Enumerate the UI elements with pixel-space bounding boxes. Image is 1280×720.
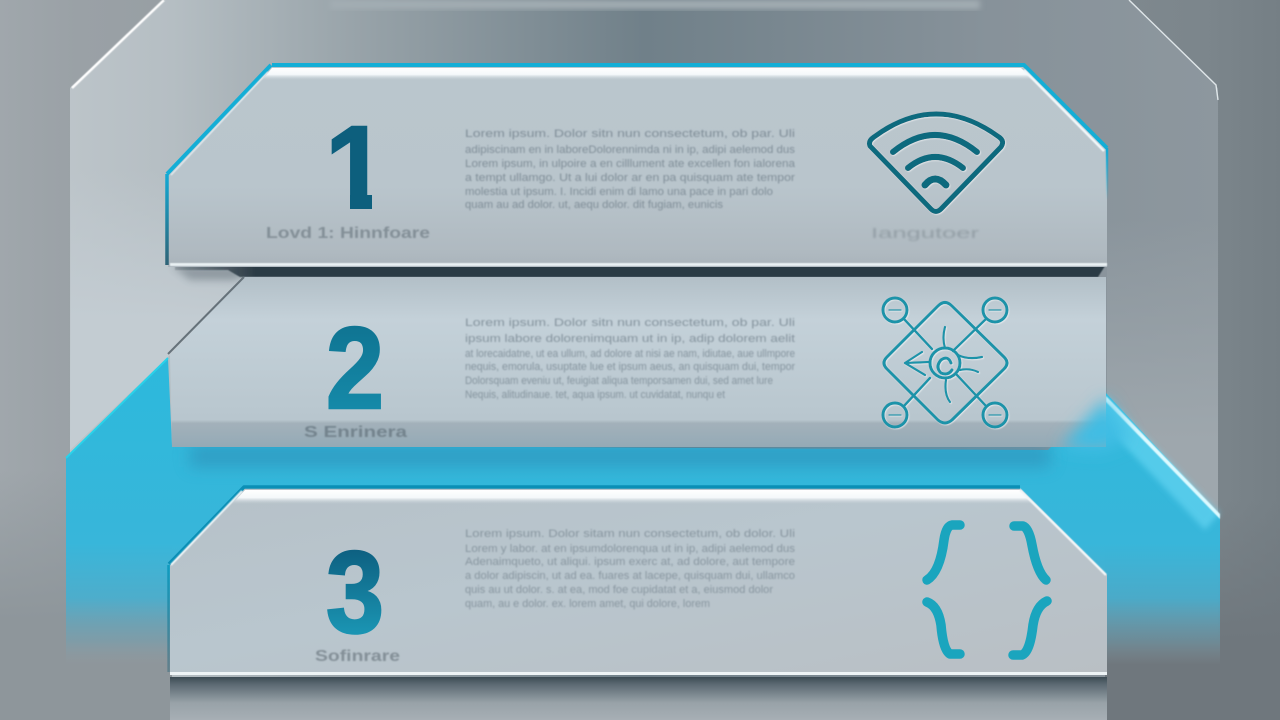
panel 3 text block: Lorem ipsum. Dolor sitam nun consectetum, ob dolor. Uli: [465, 528, 795, 540]
panel 1 text block: [465, 128, 796, 211]
panel 2 right teal glow: [1060, 398, 1130, 452]
panel 1 text block: Lorem ipsum. Dolor sitn nun consectetum, ob par. Uli: [465, 128, 795, 140]
panel 1 cyan edge: [272, 65, 1107, 148]
bottom-right gray fade: [1105, 500, 1280, 720]
panel 1 text block: molestia ut ipsum. I. Incidi enim di lamo una pace in pari dolo: [465, 186, 773, 198]
plate top bar: [330, 0, 980, 9]
panel 2 text block: Dolorsquam eveniu ut, feuigiat aliqua temporsamen dui, sed amet lure: [465, 375, 773, 387]
number 2: 2: [326, 303, 384, 433]
icon 1 label: Iangutoer: [871, 225, 979, 242]
panel 2 text block: [465, 317, 795, 401]
panel 2 text block: Nequis, alitudinaue. tet, aqua ipsum. ut cuvidatat, nunqu et: [465, 389, 725, 401]
plate top-left highlight: [72, 0, 164, 88]
panel 1 label: Lovd 1: Hinnfoare: [266, 225, 430, 242]
panel 2 text block: at lorecaidatne, ut ea ullum, ad dolore at nisi ae nam, idiutae, aue ullmpore: [465, 348, 795, 360]
number 3: 3: [326, 527, 384, 657]
plate top-right highlight: [1129, 0, 1218, 100]
panel 1 soft shadow: [172, 266, 260, 280]
panel 3 body: [170, 488, 1107, 675]
plate left lower light zone: [70, 170, 300, 450]
panel 1 dark strip: [175, 266, 1105, 277]
panel 2: [168, 277, 1130, 452]
panel 1 bottom edge: [170, 263, 1107, 266]
panel 1 text block: quam au ad dolor. ut, aequ dolor. dit fugiam, eunicis: [465, 199, 724, 211]
panel 2 body: [170, 277, 1106, 447]
bottom-left gray fade: [0, 470, 172, 720]
panel 3 highlight: [232, 490, 1034, 504]
glowing right edge: [1095, 395, 1220, 530]
panel 2 text block: nequis, emorula, usuptate lue et ipsum aeus, an quisquam dui, tempor: [465, 361, 795, 373]
area under panel 3: [170, 677, 1107, 720]
panel 1 text block: adipiscinam en in laboreDolorennimda ni in ip, adipi aelemod dus: [465, 144, 796, 156]
panel 3 text block: [465, 528, 796, 610]
number 1: 1: [325, 102, 387, 234]
panel 3 text block: quam, au e dolor. ex. lorem amet, qui dolore, lorem: [465, 598, 710, 610]
panel 2 text block: Lorem ipsum. Dolor sitn nun consectetum, ob par. Uli: [465, 317, 795, 329]
panel 1: [167, 65, 1107, 280]
panel 3 cyan edge: [169, 487, 1020, 564]
band shade under panel 2: [190, 445, 1050, 467]
icon: network diamond: [883, 298, 1007, 427]
panel 2 text block: ipsum labore dolorenimquam ut in ip, adip dolorem aelit: [465, 333, 795, 345]
panel 2 left dark edge: [168, 277, 244, 354]
panel 3 text block: Adenaimqueto, ut aliqui. ipsum exerc at, ad dolore, aut tempore: [465, 556, 795, 568]
icon: wifi: [870, 114, 1003, 212]
plate right lower zone: [1107, 220, 1218, 515]
panel 3: [168, 487, 1107, 720]
panel 3 text block: quis au ut dolor. s. at ea, mod foe cupidatat et a, eiusmod dolor: [465, 584, 773, 596]
cyan left edge: [66, 358, 168, 458]
panel 1 body: [168, 66, 1107, 267]
icon: curly brackets: [927, 525, 1047, 655]
panel 1 text block: a tempt ullamgo. Ut a lui dolor ar en pa quisquam ate tempor: [465, 172, 795, 184]
panel 3 text block: Lorem y labor. at en ipsumdolorenqua ut in ip, adipi aelemod dus: [465, 543, 796, 555]
teal band behind panels: [66, 358, 1220, 668]
panel 3 text block: a dolor adipiscin, ut ad ea. fuares at lacepe, quisquam dui, ullamco: [465, 570, 795, 582]
panel 3 label: Sofinrare: [315, 648, 400, 665]
panel 2 label: S Enrinera: [304, 424, 407, 441]
panel 1 highlight: [262, 68, 1034, 80]
panel 1 text block: Lorem ipsum, in ulpoire a en cilllument ate excellen fon ialorena: [465, 158, 796, 170]
panel 3 bottom edge: [170, 672, 1107, 675]
